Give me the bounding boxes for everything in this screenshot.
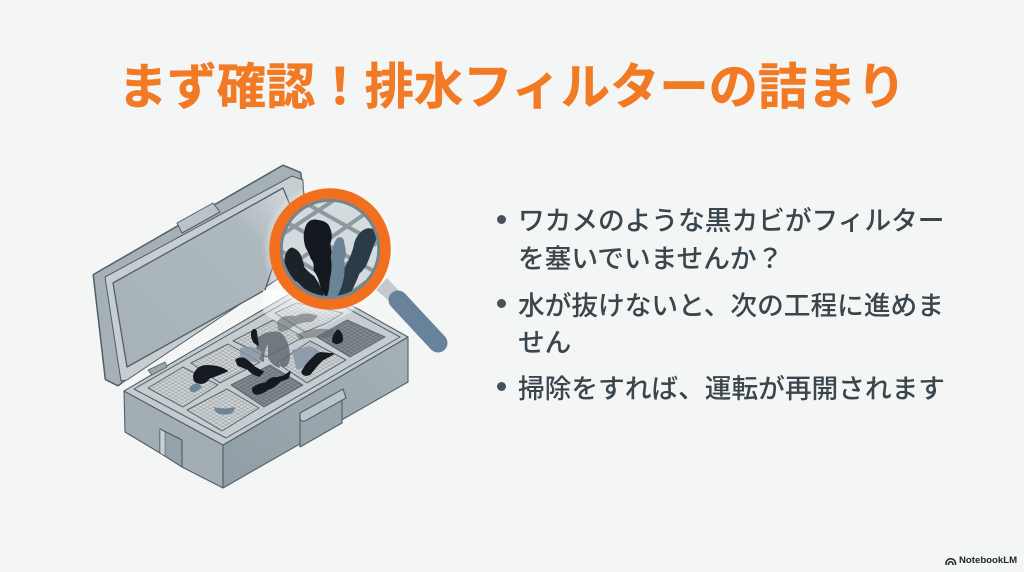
lid tab (177, 203, 220, 233)
front recess (300, 392, 342, 447)
lid (94, 166, 306, 385)
magnifier (258, 178, 438, 343)
wisp 5 (292, 346, 322, 370)
lens halo (262, 181, 398, 317)
seaweed blue (328, 238, 344, 297)
patch 1 (194, 366, 227, 383)
blue mold patches (189, 383, 235, 415)
wisp 3 (268, 342, 280, 368)
cell 8 (317, 320, 385, 357)
NotebookLM logo: NotebookLM (959, 555, 1017, 566)
lid outer shell (94, 166, 304, 385)
patch in cell 1 (189, 383, 202, 392)
lid outer shell inner fill (94, 166, 304, 385)
cell 6 (277, 341, 346, 383)
black mold patches (194, 330, 342, 394)
bullet 2 (497, 284, 944, 360)
patch 2 (236, 358, 263, 376)
handle neck (376, 278, 402, 304)
hinge tab (148, 362, 167, 375)
lens mesh (282, 202, 378, 291)
lid rim (105, 176, 306, 381)
cell 7 (275, 303, 343, 332)
light beam from lens (263, 290, 365, 340)
handle (398, 300, 438, 343)
inner tray outline (134, 288, 400, 438)
wisp 2 (256, 332, 290, 367)
right face (223, 337, 408, 488)
icon: NotebookLM mark (945, 558, 956, 565)
left face (124, 391, 223, 488)
filter cells (148, 303, 385, 431)
bullet 2: 水が抜けないと、次の工程に進めま (518, 284, 944, 323)
bullet 2: せん (518, 321, 571, 360)
patch 6 (252, 330, 258, 345)
lens lower tint (288, 276, 320, 300)
notch strip (160, 429, 165, 456)
wisp 6 (240, 347, 262, 362)
mold smoke wisps (240, 314, 334, 370)
patch 3 (253, 372, 290, 394)
front clip (300, 389, 346, 421)
patch 5 (333, 330, 342, 343)
cell 3 (191, 344, 260, 383)
box base (124, 282, 408, 488)
lens background (282, 202, 378, 296)
patch 4 (302, 353, 333, 375)
bullet 1: を塞いでいませんか？ (518, 237, 783, 276)
notch (160, 429, 182, 467)
bullet 1: ワカメのような黒カビがフィルター (518, 199, 944, 238)
wisp 4 (296, 329, 334, 340)
lens view (282, 202, 378, 296)
patch in cell 2 (214, 407, 235, 415)
top face (124, 282, 408, 445)
lens inner ring (281, 200, 379, 298)
bullet 1 (497, 199, 944, 276)
wisp 1 (277, 314, 318, 332)
cell 4 (231, 365, 303, 407)
bullet 3: 掃除をすれば、運転が再開されます (518, 367, 945, 406)
cell 1 (148, 367, 218, 407)
orange ring (274, 194, 386, 304)
lid inner panel (113, 188, 292, 367)
title: まず確認！排水フィルターの詰まり (118, 48, 906, 119)
seaweed right (338, 230, 376, 297)
seaweed main (305, 221, 332, 297)
cell 5 (233, 320, 303, 357)
illustration: drain filter box with magnifier (92, 164, 448, 489)
bullet list (497, 199, 945, 406)
seaweed left (286, 249, 323, 297)
cell 2 (187, 389, 259, 431)
